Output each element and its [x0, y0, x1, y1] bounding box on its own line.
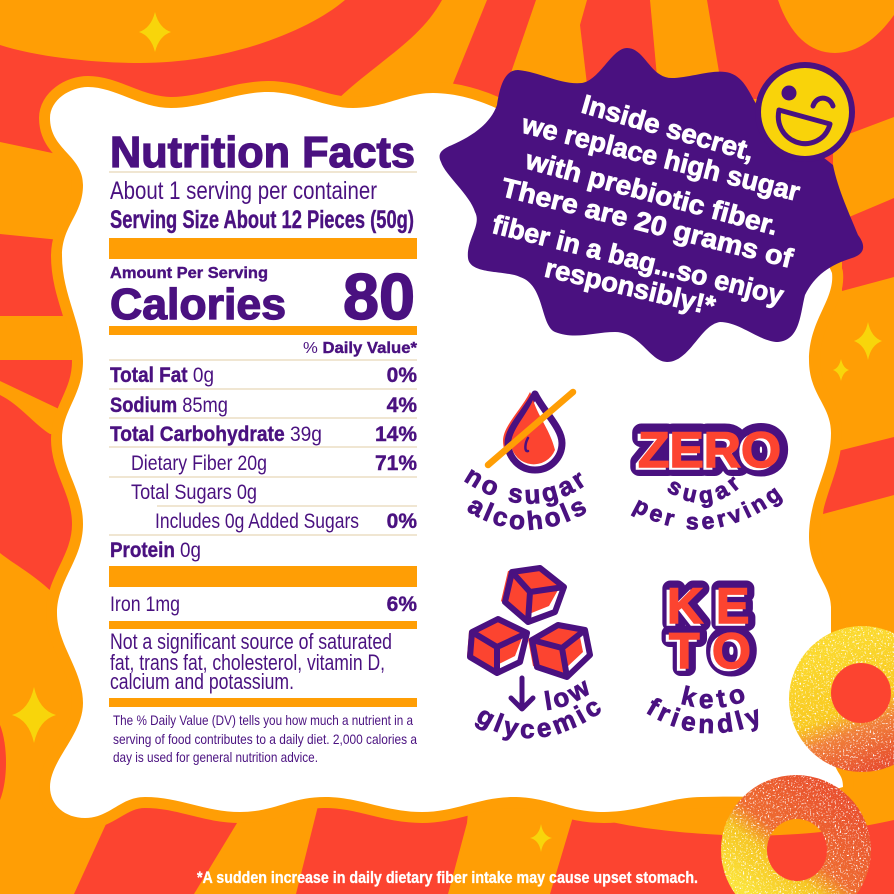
icon: crossed-out drop	[488, 392, 573, 470]
label: keto	[681, 685, 744, 709]
label	[464, 469, 586, 530]
badge: keto friendly	[646, 578, 758, 734]
row: dietary fiber: Dietary Fiber 20g	[131, 452, 267, 475]
bubble text: with prebiotic fiber.	[522, 145, 781, 241]
row: protein: Protein 0g	[110, 539, 201, 562]
icon: KETO lettering: E	[716, 578, 749, 634]
orange bar	[109, 326, 417, 335]
value: dietary fiber: 71%	[375, 452, 417, 475]
row: iron: Iron 1mg	[110, 593, 180, 616]
label: per serving	[630, 488, 783, 530]
row: total carbohydrate: Total Carbohydrate 39g	[110, 423, 322, 446]
row: total fat: Total Fat 0g	[110, 364, 214, 387]
note: not a significant source	[110, 629, 392, 694]
nutrition facts panel	[109, 128, 418, 765]
starburst callout bubble	[440, 48, 863, 362]
row: added sugars: Includes 0g Added Sugars	[155, 510, 359, 533]
calories label: Calories	[110, 280, 286, 329]
calories value: 80	[343, 260, 415, 333]
orange bar	[109, 698, 417, 707]
label: no sugar	[464, 469, 584, 507]
bubble shape	[440, 48, 863, 362]
bubble text	[489, 89, 803, 321]
daily value explanation: serving of food contributes to a daily diet. 2,000 calories a	[113, 731, 417, 747]
label: sugar	[668, 476, 739, 508]
icon: KETO lettering: O	[712, 623, 751, 679]
icon: KETO lettering: E	[713, 580, 746, 636]
daily value explanation: The % Daily Value (DV) tells you how much a nutrient in a	[113, 712, 413, 728]
badge: low glycemic	[467, 565, 601, 741]
value: total carbohydrate: 14%	[375, 423, 417, 446]
label: glycemic	[474, 702, 601, 741]
orange bar	[109, 238, 417, 259]
icon: ZERO lettering: ZERO	[635, 424, 778, 480]
icon: KETO lettering: T	[666, 625, 697, 681]
bubble text: responsibly!*	[542, 253, 719, 321]
daily value explanation: day is used for general nutrition advice.	[113, 749, 318, 765]
footnote: *A sudden increase in daily dietary fiber intake may cause upset stomach.	[197, 869, 698, 887]
icon: winking smiley	[755, 62, 855, 162]
gummy ring: lower	[721, 775, 871, 894]
serving size: Serving Size About 12 Pieces (50g)	[110, 206, 414, 234]
row: total sugars: Total Sugars 0g	[131, 481, 257, 504]
label: low	[544, 680, 589, 710]
icon: ZERO lettering: ZERO	[638, 422, 781, 478]
daily value header: % Daily Value*	[303, 340, 418, 357]
note: not a significant source: calcium and potassium.	[110, 669, 294, 694]
note: not a significant source: Not a significant source of saturated	[110, 629, 392, 654]
icon: down arrow	[511, 678, 533, 709]
icon: KETO lettering: E	[716, 578, 749, 634]
icon: KETO lettering: K	[667, 578, 703, 634]
value: total fat: 0%	[387, 364, 417, 387]
label	[646, 685, 758, 734]
badge: no sugar alcohols	[464, 388, 586, 530]
icon: KETO lettering	[664, 578, 751, 681]
daily value explanation	[113, 712, 417, 765]
bubble text: There are 20 grams of	[498, 172, 797, 274]
icon: ZERO lettering: ZERO	[638, 422, 781, 478]
icon: KETO lettering: T	[669, 623, 700, 679]
row: sodium: Sodium 85mg	[110, 394, 228, 417]
icon: KETO lettering: T	[669, 623, 700, 679]
bubble text: we replace high sugar	[518, 109, 803, 207]
label: friendly	[646, 698, 758, 734]
value: iron: 6%	[387, 593, 417, 616]
bubble text: fiber in a bag...so enjoy	[489, 209, 787, 311]
label: alcohols	[468, 500, 586, 530]
icon: KETO lettering: O	[709, 625, 748, 681]
bubble text: Inside secret,	[578, 89, 758, 167]
note: not a significant source: fat, trans fat, cholesterol, vitamin D,	[110, 650, 385, 675]
orange bar	[109, 621, 417, 629]
badge: zero sugar per serving	[630, 422, 788, 530]
orange bar	[109, 566, 417, 587]
icon: sugar cubes	[467, 567, 590, 677]
heading: Nutrition Facts: Nutrition Facts	[110, 128, 415, 177]
gummy ring: upper	[789, 626, 894, 772]
value: added sugars: 0%	[387, 510, 417, 533]
icon: KETO lettering: K	[667, 578, 703, 634]
servings per container: About 1 serving per container	[110, 177, 377, 205]
icon: KETO lettering: O	[712, 623, 751, 679]
white wavy panel with orange border	[50, 87, 843, 818]
icon: KETO lettering: K	[664, 580, 700, 636]
value: sodium: 4%	[387, 394, 417, 417]
amount per serving: Amount Per Serving	[110, 265, 268, 282]
